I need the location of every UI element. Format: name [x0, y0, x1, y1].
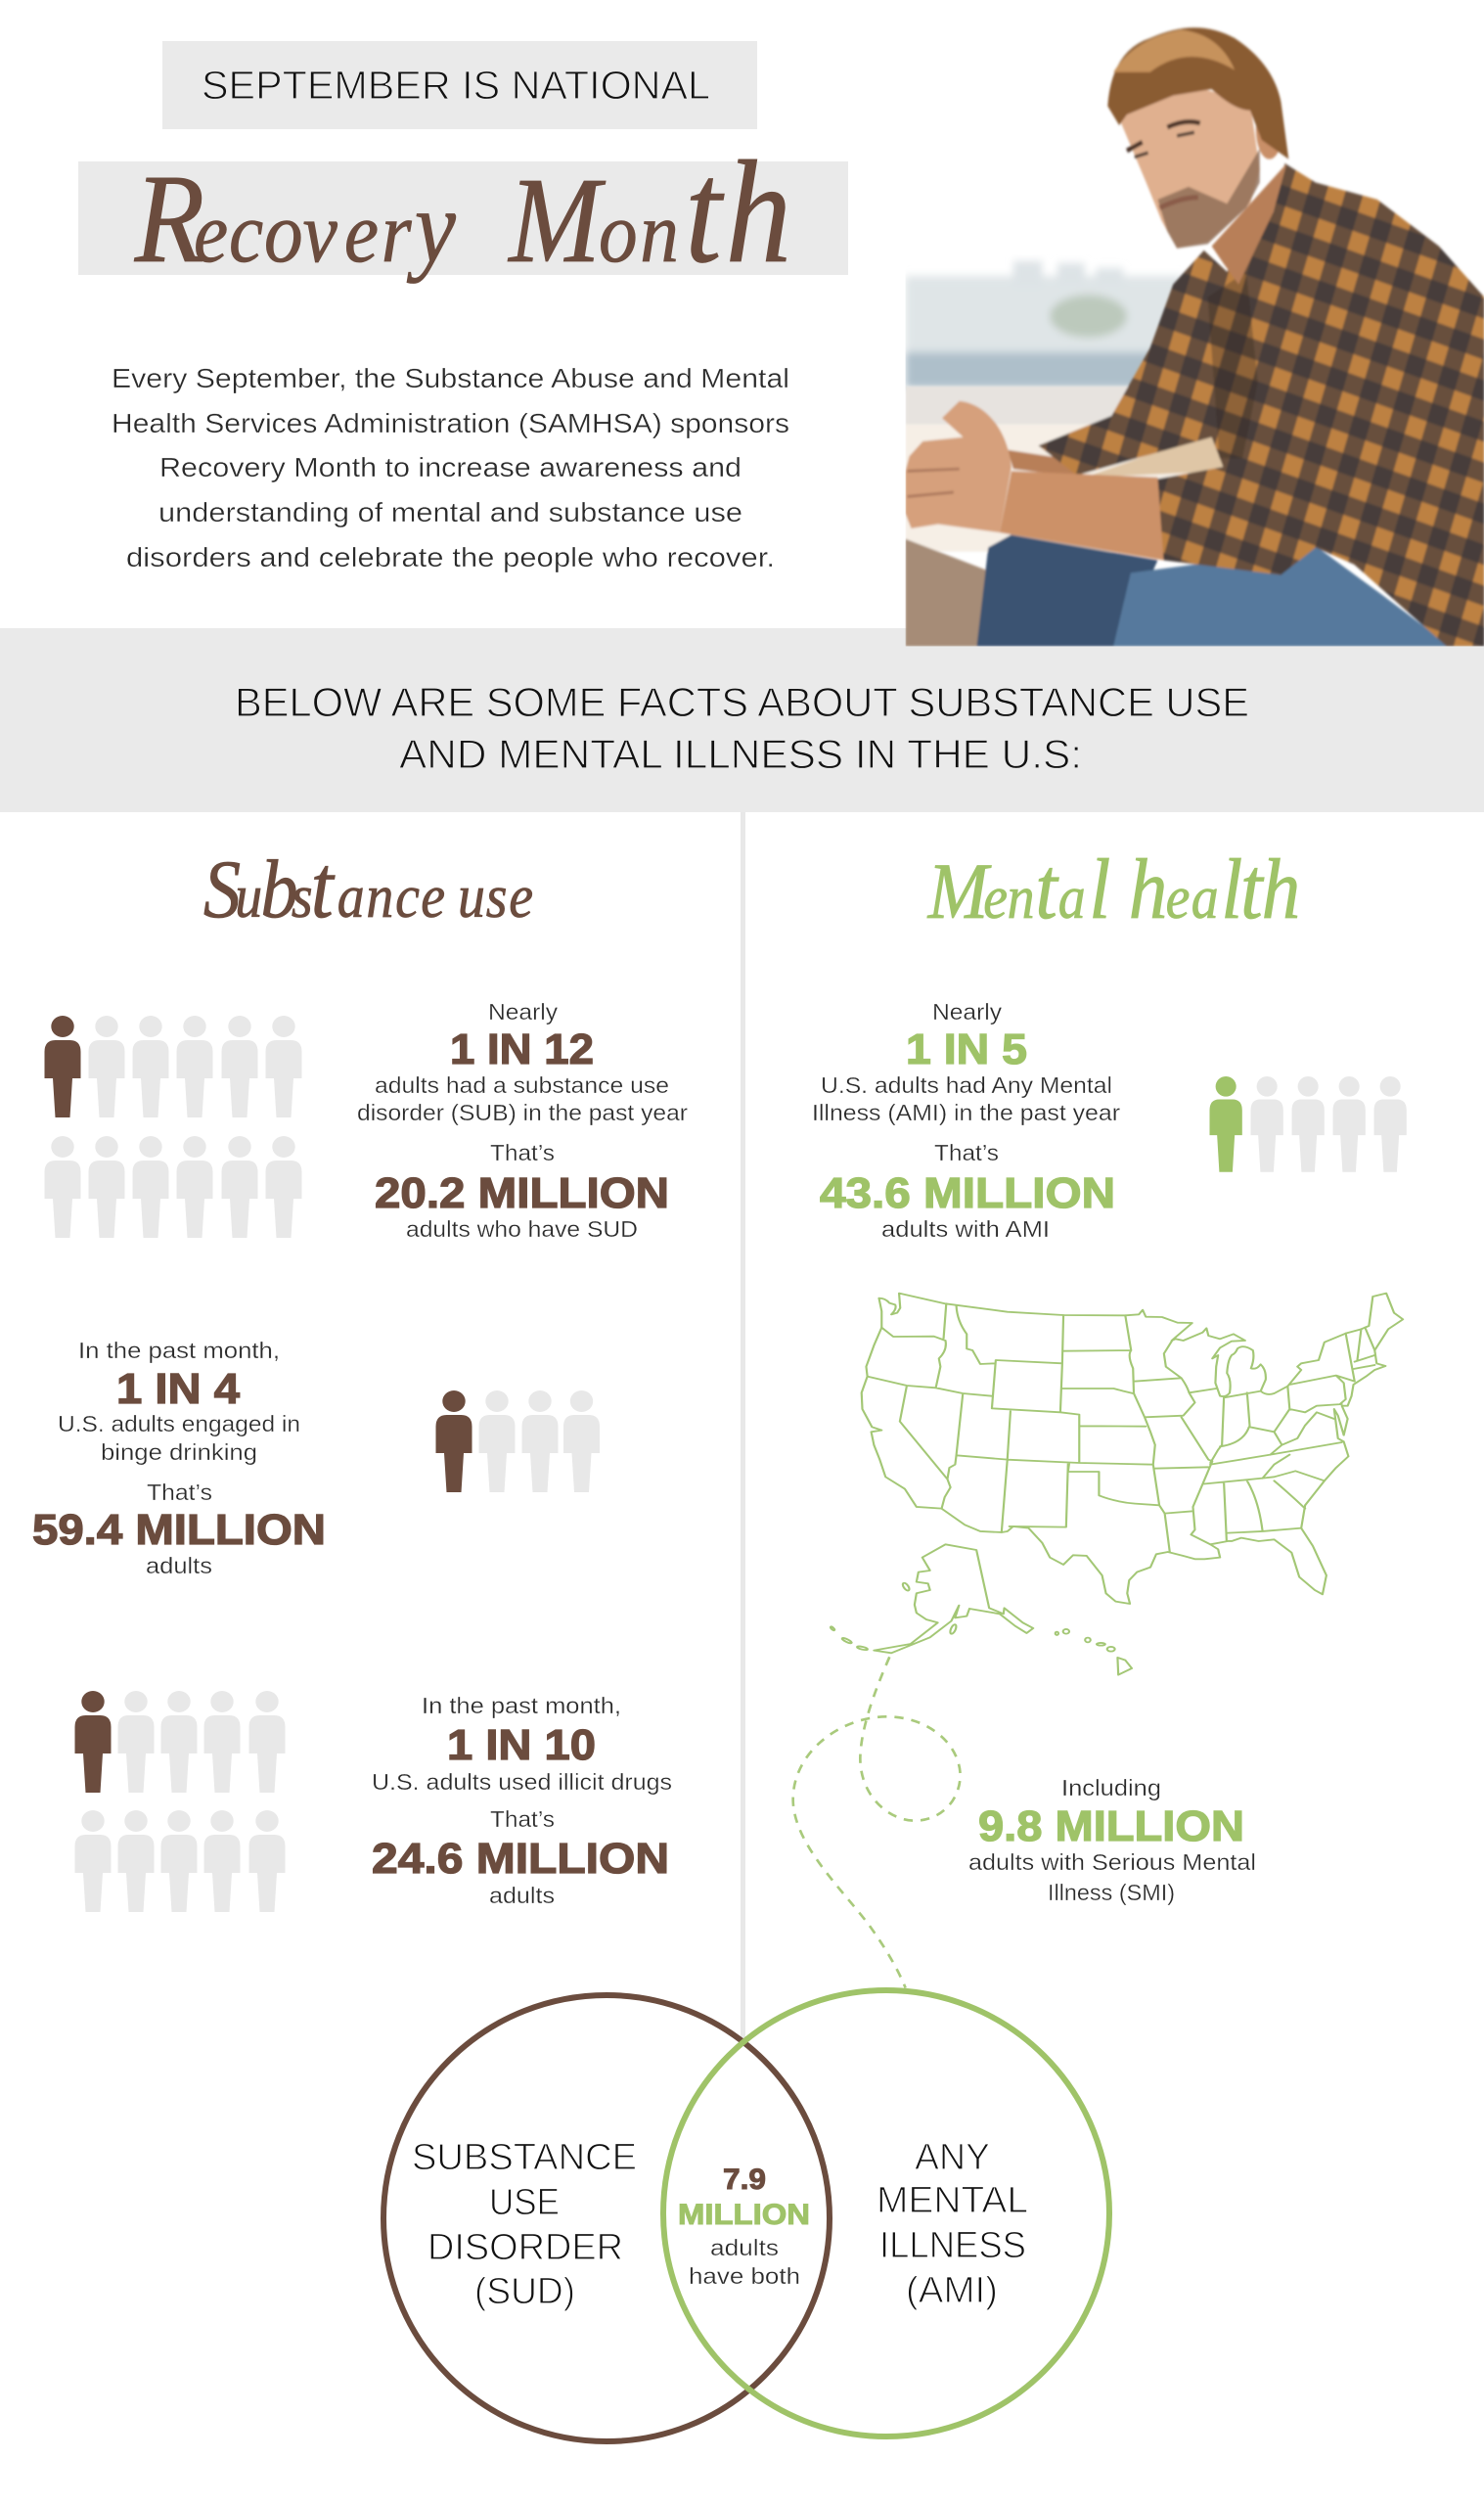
heading: Substance use: b — [260, 843, 298, 935]
stat block: 1 in 12 substance use disorder: That’s — [490, 1140, 555, 1165]
heading: Mental health: M — [927, 845, 992, 935]
title box: Recovery Month: M — [507, 153, 607, 288]
title box: Recovery Month: h — [726, 131, 791, 294]
overlap stat: 7.9 million have both: adults — [710, 2235, 779, 2260]
stat block: 1 in 10 illicit drugs: U.S. adults used illicit drugs — [372, 1769, 672, 1795]
heading: Substance use: u — [235, 862, 262, 931]
stat block: 1 in 5 any mental illness: That’s — [934, 1140, 999, 1165]
title box: Recovery Month: t — [685, 131, 725, 294]
heading: Substance use: t — [311, 837, 336, 936]
stat block: 1 in 12 substance use disorder: adults had a substance use — [375, 1072, 669, 1098]
heading: Mental health: h — [1129, 842, 1167, 937]
intro paragraph: Every September, the Substance Abuse and Mental — [112, 363, 789, 393]
stat block: 9.8 million serious mental illness: Including — [1061, 1775, 1161, 1800]
label: substance use disorder — [412, 2137, 637, 2312]
title box: Recovery Month — [78, 131, 848, 294]
label: substance use disorder: DISORDER — [427, 2227, 623, 2268]
stat block: 1 in 4 binge drinking: In the past month, — [78, 1338, 280, 1363]
stat block: 1 in 12 substance use disorder: adults who have SUD — [406, 1216, 638, 1242]
heading: Substance use: s — [292, 862, 313, 931]
icon group: 1 in 5 people — [1209, 1076, 1407, 1172]
stat block: 1 in 4 binge drinking: That’s — [147, 1480, 212, 1505]
overlap stat: 7.9 million have both: 7.9 — [723, 2163, 766, 2196]
venn diagram — [383, 1990, 1109, 2441]
overlap stat: 7.9 million have both: have both — [689, 2263, 800, 2289]
stat block: 1 in 4 binge drinking: U.S. adults engaged in — [58, 1411, 300, 1436]
title box: Recovery Month: R — [134, 148, 204, 289]
stat block: 1 in 5 any mental illness — [812, 999, 1120, 1242]
stat block: 9.8 million serious mental illness: 9.8 MILLION — [978, 1802, 1244, 1850]
stat block: 1 in 4 binge drinking: adults — [146, 1553, 212, 1578]
title box: Recovery Month: ecover — [194, 185, 412, 281]
stat block: 1 in 12 substance use disorder: 20.2 MILLION — [375, 1169, 669, 1217]
label: any mental illness — [877, 2137, 1028, 2311]
intro paragraph: Recovery Month to increase awareness and — [159, 452, 742, 482]
stat block: 1 in 10 illicit drugs: adults — [489, 1883, 555, 1908]
icon group: 1 in 10 people — [74, 1691, 286, 1912]
heading: Mental health: h — [1262, 842, 1300, 937]
circle: substance use disorder — [383, 1995, 830, 2441]
title box: Recovery Month: on — [599, 185, 679, 281]
heading: Mental health: en — [983, 863, 1034, 932]
heading: Mental health: t — [1240, 840, 1265, 937]
column divider — [741, 812, 745, 2040]
stat block: 1 in 5 any mental illness: adults with AMI — [881, 1216, 1050, 1242]
label: any mental illness: (AMI) — [906, 2270, 998, 2311]
label: any mental illness: ILLNESS — [879, 2225, 1026, 2266]
heading: Mental health: t — [1035, 840, 1059, 937]
icon group: 1 in 4 people — [436, 1390, 600, 1492]
heading: Substance use: use — [458, 862, 533, 931]
stat block: 1 in 4 binge drinking: 59.4 MILLION — [32, 1506, 326, 1554]
stat block: 1 in 4 binge drinking: binge drinking — [101, 1439, 257, 1465]
stat block: 1 in 4 binge drinking: 1 IN 4 — [116, 1365, 241, 1413]
stat block: 1 in 10 illicit drugs — [372, 1693, 672, 1908]
stat block: 9.8 million serious mental illness: Illness (SMI) — [1048, 1880, 1175, 1905]
photo: man in plaid shirt — [906, 27, 1484, 647]
label: any mental illness: MENTAL — [877, 2180, 1028, 2221]
stat block: 1 in 5 any mental illness: Illness (AMI) in the past year — [812, 1100, 1120, 1125]
heading: Mental health: ea — [1166, 863, 1219, 932]
heading: Substance use: ance — [337, 862, 459, 931]
stat block: 1 in 10 illicit drugs: In the past month, — [422, 1693, 621, 1718]
stat block: 1 in 12 substance use disorder: disorder (SUB) in the past year — [357, 1100, 688, 1125]
stat block: 1 in 10 illicit drugs: That’s — [490, 1806, 555, 1832]
intro paragraph: disorders and celebrate the people who recover. — [126, 542, 775, 572]
intro paragraph — [112, 363, 789, 572]
dashed path from map to venn diagram — [793, 1657, 961, 1988]
stat block: 1 in 12 substance use disorder: 1 IN 12 — [450, 1025, 594, 1073]
stat block: 9.8 million serious mental illness — [968, 1775, 1256, 1905]
heading: Mental health: l — [1221, 842, 1242, 937]
facts heading — [235, 679, 1249, 777]
stat block: 1 in 12 substance use disorder — [357, 999, 688, 1242]
stat block: 1 in 5 any mental illness: 43.6 MILLION — [820, 1169, 1115, 1217]
title box: Recovery Month: y — [406, 169, 478, 284]
stat block: 1 in 10 illicit drugs: 24.6 MILLION — [372, 1835, 669, 1883]
overlap stat: 7.9 million have both: MILLION — [678, 2199, 810, 2231]
header box: September is National: SEPTEMBER IS NATIONAL — [202, 63, 710, 108]
circle: any mental illness — [663, 1990, 1109, 2437]
grey facts band — [0, 628, 1484, 812]
heading: Mental health: l — [1089, 842, 1130, 937]
header box: September is National — [162, 41, 757, 129]
map of the United States — [830, 1294, 1403, 1675]
overlap stat: 7.9 million have both — [678, 2163, 810, 2289]
facts heading: BELOW ARE SOME FACTS ABOUT SUBSTANCE USE — [235, 679, 1249, 725]
intro paragraph: Health Services Administration (SAMHSA) sponsors — [112, 408, 789, 438]
label: substance use disorder: USE — [489, 2182, 560, 2223]
heading: Mental health: a — [1058, 863, 1086, 932]
stat block: 1 in 5 any mental illness: Nearly — [932, 999, 1003, 1025]
icon group: 1 in 12 people — [45, 1016, 301, 1238]
stat block: 1 in 10 illicit drugs: 1 IN 10 — [447, 1721, 596, 1769]
stat block: 1 in 4 binge drinking — [32, 1338, 326, 1578]
facts heading: AND MENTAL ILLNESS IN THE U.S: — [399, 731, 1082, 777]
intro paragraph: understanding of mental and substance use — [158, 497, 742, 527]
stat block: 1 in 5 any mental illness: U.S. adults had Any Mental — [821, 1072, 1112, 1098]
heading: Substance use: S — [203, 843, 241, 935]
label: substance use disorder: SUBSTANCE — [412, 2137, 637, 2178]
stat block: 1 in 5 any mental illness: 1 IN 5 — [906, 1025, 1027, 1073]
stat block: 1 in 12 substance use disorder: Nearly — [488, 999, 559, 1025]
label: any mental illness: ANY — [915, 2137, 990, 2178]
label: substance use disorder: (SUD) — [474, 2271, 575, 2312]
stat block: 9.8 million serious mental illness: adults with Serious Mental — [968, 1849, 1256, 1875]
